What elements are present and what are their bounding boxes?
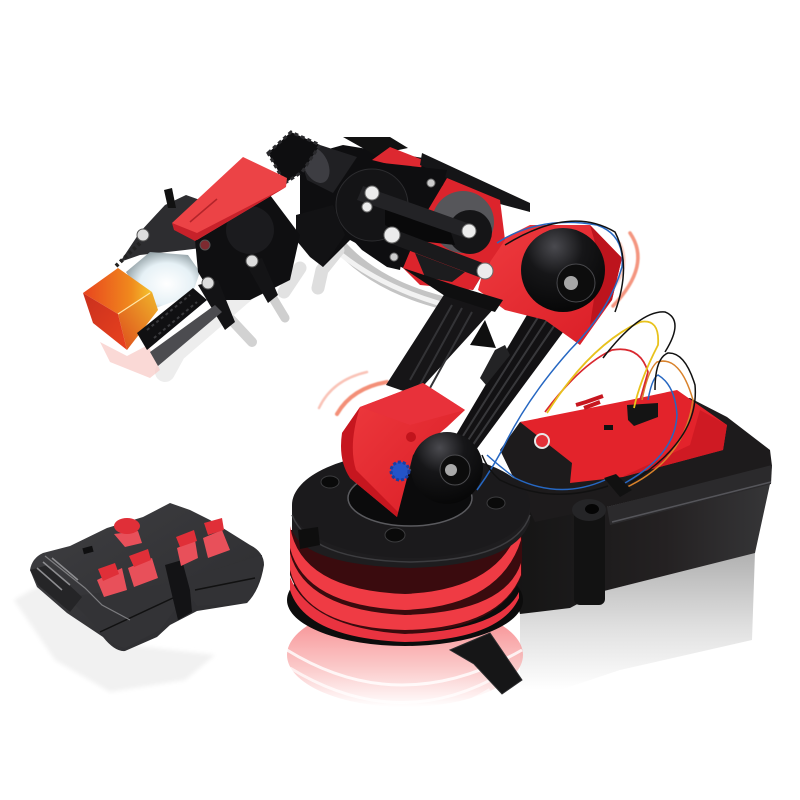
icon: blue gear xyxy=(391,462,409,480)
wrist gear xyxy=(268,132,320,183)
upper red gearbox xyxy=(478,225,622,345)
wrist roller xyxy=(297,143,357,193)
red cube xyxy=(83,268,158,350)
silver screws xyxy=(362,179,493,279)
connector block xyxy=(627,403,658,426)
front arm link xyxy=(450,298,578,458)
gripper assembly xyxy=(116,188,300,330)
wire clip xyxy=(604,474,632,497)
base clip xyxy=(298,527,320,549)
top black strip xyxy=(343,137,408,155)
gripper upper claw xyxy=(198,280,235,330)
upper link xyxy=(357,186,470,238)
ghost arm motion blur xyxy=(165,246,440,372)
screw heads xyxy=(321,476,505,542)
wrist disc xyxy=(336,169,408,241)
lower red motor housing xyxy=(341,383,465,517)
gripper screws xyxy=(137,229,258,289)
hinge post xyxy=(572,499,606,605)
rear arm link xyxy=(386,290,497,395)
base box xyxy=(500,398,772,614)
remote buttons xyxy=(97,518,230,597)
ridge strip xyxy=(420,153,530,212)
upper joint ball xyxy=(521,228,605,312)
under bar xyxy=(403,268,503,312)
base leg xyxy=(450,633,522,694)
gripper light xyxy=(126,252,200,310)
centre plate xyxy=(385,200,455,245)
reflection: base box xyxy=(520,552,755,690)
lower joint ball xyxy=(411,432,483,504)
black backing silhouette xyxy=(300,145,500,290)
red behind top xyxy=(372,147,423,172)
gripper hub xyxy=(195,195,300,300)
controller wires xyxy=(477,221,695,494)
base disc top xyxy=(292,452,530,568)
wrist block xyxy=(296,205,345,267)
remote control xyxy=(30,503,264,651)
lower link xyxy=(384,227,488,279)
red discs stack xyxy=(287,525,523,646)
lower plate xyxy=(350,232,403,270)
reflection: remote xyxy=(14,585,215,692)
top plate xyxy=(360,163,447,232)
reflection: cube xyxy=(100,342,160,378)
red housing xyxy=(403,178,505,290)
lower gear xyxy=(415,253,465,282)
lower gripper jaw xyxy=(137,288,222,366)
upper arm body xyxy=(268,132,530,312)
motion arcs xyxy=(319,233,638,414)
grey motor xyxy=(432,191,494,253)
controller board red cover xyxy=(520,390,727,483)
reflection: red base discs xyxy=(287,603,523,718)
remote switch window xyxy=(82,546,94,554)
red gripper cap xyxy=(172,157,287,241)
